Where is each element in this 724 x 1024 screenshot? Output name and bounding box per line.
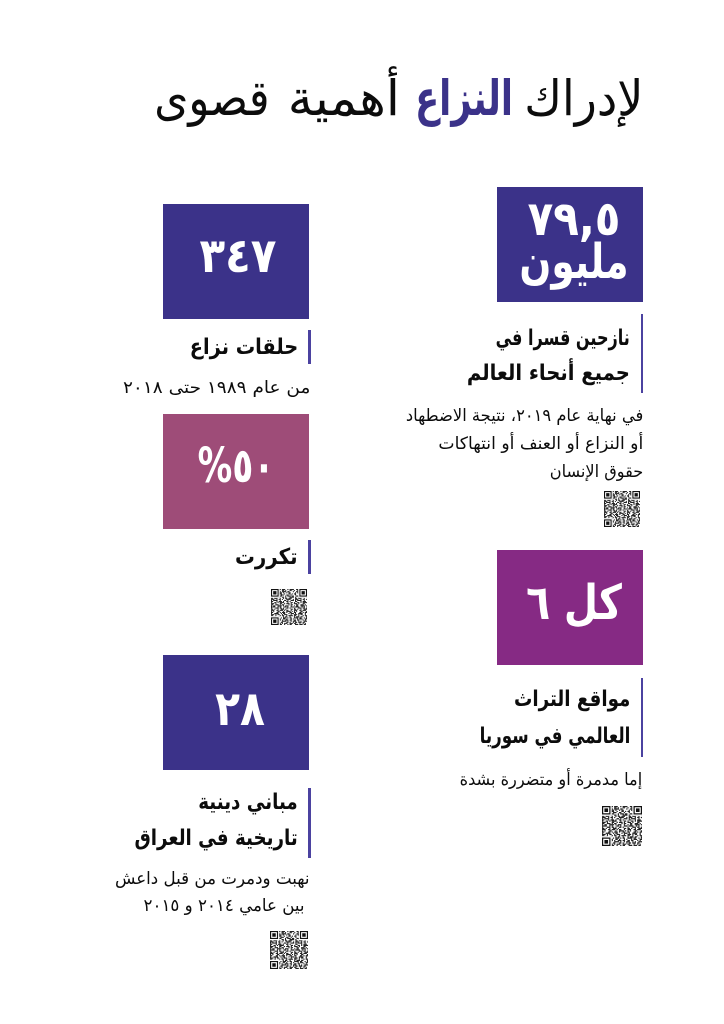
stat box: 79.5 million: مليون — [519, 234, 629, 290]
heading: نازحين قسرا في — [496, 326, 630, 351]
stat box: 79.5 million — [497, 187, 643, 302]
title: النزاع — [415, 70, 513, 127]
description: إما مدمرة أو متضررة بشدة — [459, 770, 642, 790]
description: نهبت ودمرت من قبل داعش — [115, 869, 310, 889]
title: أهمية — [288, 70, 400, 127]
heading: تكررت — [235, 545, 298, 570]
stat box: 28 — [163, 655, 309, 770]
icon: QR code — [602, 806, 642, 846]
panel: conflict episodes — [123, 204, 311, 398]
panel: religious buildings — [115, 655, 311, 969]
description: بين عامي ٢٠١٤ و ٢٠١٥ — [144, 896, 305, 916]
description: حقوق الإنسان — [549, 462, 643, 482]
accent bar — [308, 540, 310, 574]
description — [406, 406, 643, 482]
stat box: 347 — [163, 204, 309, 319]
accent bar — [308, 788, 310, 858]
icon: QR code — [270, 931, 308, 969]
icon: QR code — [271, 589, 307, 625]
stat box: 28: ٢٨ — [215, 681, 265, 737]
title: قصوى — [155, 70, 270, 127]
icon: QR code — [604, 491, 640, 527]
heading: مباني دينية — [198, 790, 298, 815]
heading: مواقع التراث — [514, 687, 630, 712]
accent bar — [308, 330, 310, 364]
stat box: 6 of: كل ٦ — [526, 575, 622, 631]
description: من عام ١٩٨٩ حتى ٢٠١٨ — [123, 378, 310, 398]
stat box: 347: ٣٤٧ — [200, 228, 276, 284]
heading: العالمي في سوريا — [479, 724, 630, 749]
stat box: 6 of — [497, 550, 643, 665]
heading — [467, 326, 630, 386]
heading: تاريخية في العراق — [135, 826, 298, 851]
title — [155, 66, 643, 127]
stat box: 79.5 million: ٧٩,٥ — [528, 191, 620, 247]
heading: جميع أنحاء العالم — [467, 361, 630, 386]
panel: heritage sites — [459, 550, 643, 846]
panel: displaced people — [406, 187, 643, 527]
stat box: 50%: ٥٠% — [198, 438, 274, 494]
accent bar — [640, 314, 643, 393]
description: في نهاية عام ٢٠١٩، نتيجة الاضطهاد — [406, 406, 643, 426]
title: لإدراك — [524, 70, 643, 127]
description: أو النزاع أو العنف أو انتهاكات — [438, 434, 643, 454]
stat box: 50% — [163, 414, 309, 529]
accent bar — [640, 678, 643, 757]
heading: حلقات نزاع — [190, 335, 298, 360]
heading — [135, 790, 298, 851]
panel: 50 percent — [163, 414, 311, 625]
heading — [479, 687, 630, 749]
description — [115, 869, 310, 916]
